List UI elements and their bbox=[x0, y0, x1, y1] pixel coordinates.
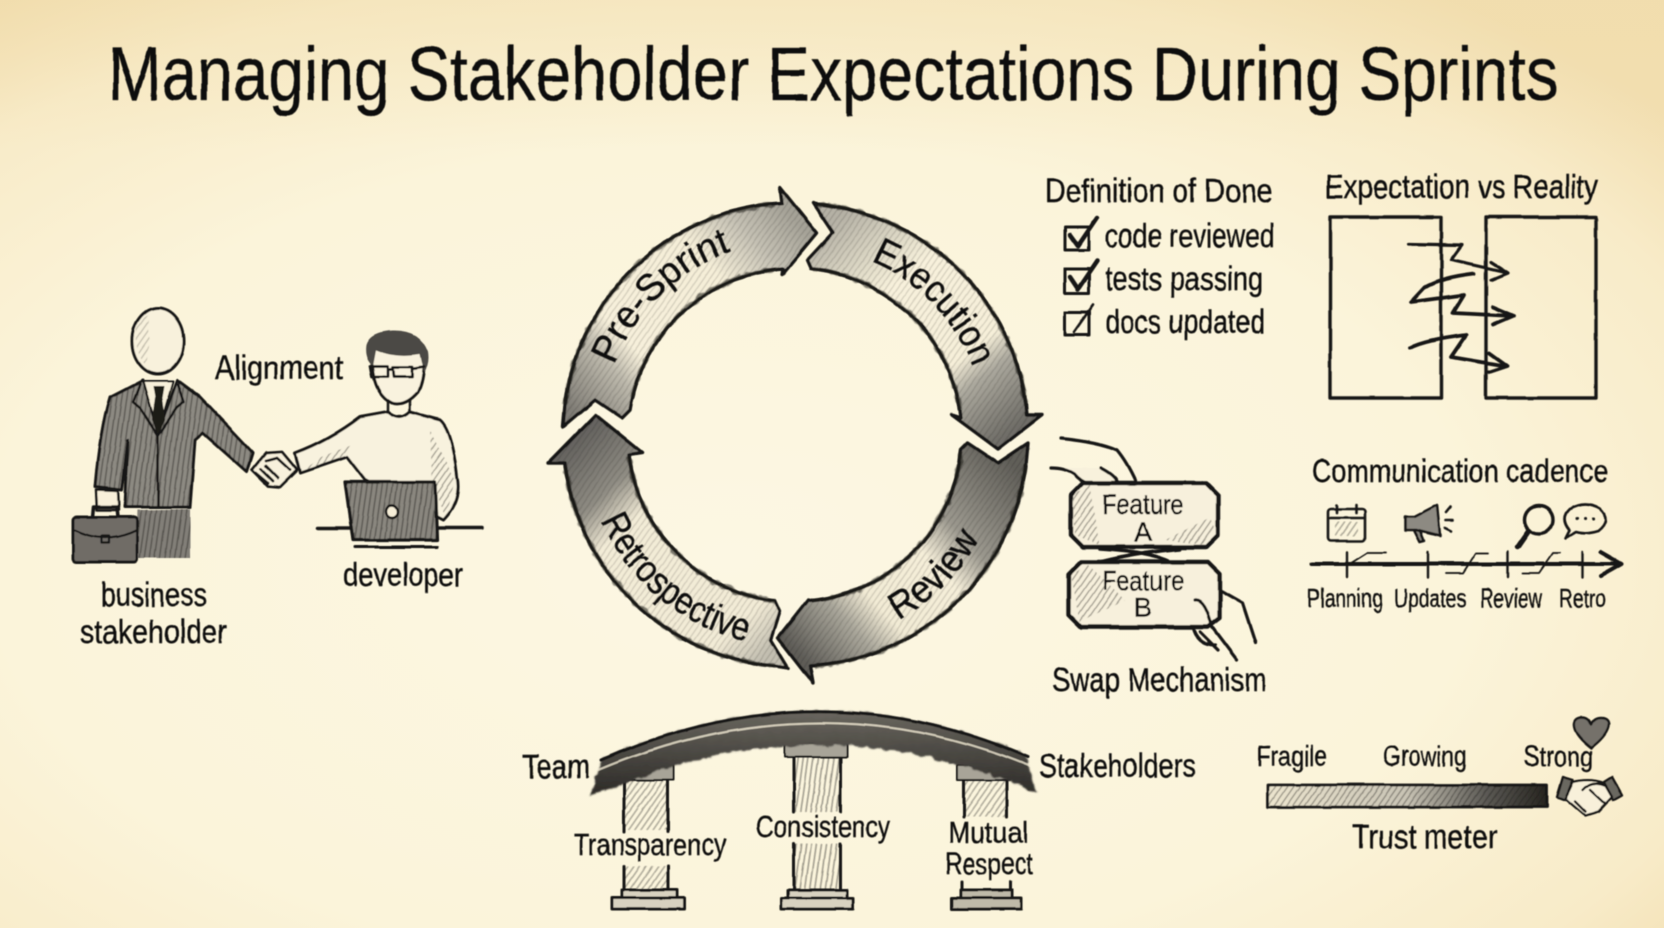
glasses bbox=[370, 366, 424, 377]
expectation box bbox=[1330, 217, 1441, 398]
heading: Swap Mechanism bbox=[1052, 661, 1267, 698]
trouser hatching bbox=[135, 509, 190, 558]
timeline labels: Review bbox=[1480, 583, 1542, 613]
bridge labels: Respect bbox=[945, 846, 1033, 881]
bridge labels bbox=[523, 747, 1196, 881]
pillar: right bbox=[952, 765, 1021, 909]
bridge labels: Mutual bbox=[948, 815, 1028, 850]
item: code reviewed bbox=[1065, 217, 1275, 254]
card hatching B bbox=[1071, 565, 1125, 622]
label: business stakeholder: business bbox=[101, 576, 207, 613]
hands bbox=[1565, 780, 1612, 816]
arrow: Retrospective bbox=[548, 415, 788, 668]
text Pre-Sprint: Pre-Sprint bbox=[590, 229, 732, 363]
card: Feature B bbox=[1069, 562, 1220, 627]
base bbox=[952, 890, 1021, 909]
card text: B bbox=[1134, 592, 1152, 623]
reality box bbox=[1486, 217, 1596, 398]
chart: sprint cycle ring bbox=[546, 185, 1044, 686]
panel: Definition of Done checklist bbox=[1045, 172, 1275, 340]
hatching bbox=[548, 415, 788, 668]
pillar: left bbox=[612, 765, 684, 909]
top hand fingers bbox=[1051, 468, 1118, 489]
icon: megaphone bbox=[1405, 505, 1453, 542]
heading: Expectation vs Reality bbox=[1325, 168, 1598, 205]
bridge labels: Consistency bbox=[756, 809, 890, 844]
shaft shading bbox=[625, 780, 667, 890]
briefcase handle bbox=[93, 507, 118, 517]
item: docs updated: docs updated bbox=[1105, 303, 1265, 340]
capital bbox=[957, 765, 1010, 780]
shirt bbox=[143, 381, 173, 433]
capital bbox=[619, 765, 674, 780]
label: business stakeholder: stakeholder bbox=[80, 613, 227, 650]
arch highlight lines bbox=[598, 723, 1030, 770]
hand holding case bbox=[96, 490, 119, 510]
twist between cards bbox=[1100, 549, 1180, 562]
text Retrospective: Retrospective bbox=[600, 510, 750, 642]
handshake hands bbox=[252, 452, 297, 487]
icon: magnifier bbox=[1518, 506, 1553, 547]
panel: Swap Mechanism bbox=[1051, 438, 1267, 698]
face bbox=[372, 350, 424, 404]
sweater bbox=[295, 412, 458, 520]
meter hatching bbox=[1268, 785, 1547, 807]
suit hatching bbox=[95, 380, 253, 507]
developer figure bbox=[295, 331, 482, 547]
card text: Feature bbox=[1102, 565, 1184, 596]
card text: Feature bbox=[1102, 489, 1184, 520]
label: developer: developer bbox=[343, 556, 463, 593]
item: tests passing: tests passing bbox=[1105, 260, 1263, 297]
shaft shading bbox=[965, 780, 1006, 817]
arrow: Review bbox=[778, 443, 1028, 683]
meter bar bbox=[1268, 785, 1547, 807]
hair bbox=[366, 331, 428, 372]
text Execution: Execution bbox=[872, 237, 990, 366]
timeline labels: Retro bbox=[1559, 583, 1606, 613]
scale labels: Strong bbox=[1524, 741, 1593, 773]
text Review: Review bbox=[886, 527, 978, 620]
ring label path: Pre-Sprint bbox=[614, 241, 830, 365]
trousers bbox=[135, 509, 190, 558]
panel: bridge of trust bbox=[523, 711, 1196, 909]
bottom hand bbox=[1193, 590, 1256, 660]
laptop bbox=[345, 482, 437, 540]
shaft shading bbox=[795, 757, 839, 890]
timeline ticks bbox=[1347, 552, 1582, 577]
icon: speech bubble bbox=[1565, 504, 1606, 538]
paper top shading bbox=[0, 0, 1664, 150]
hatching bbox=[808, 203, 1042, 449]
label: Alignment: Alignment bbox=[215, 349, 343, 386]
panel: Expectation vs Reality bbox=[1325, 168, 1598, 398]
briefcase flap bbox=[74, 530, 136, 543]
desk line bbox=[318, 526, 482, 530]
timeline arrow bbox=[1312, 552, 1622, 576]
top hand bbox=[1061, 438, 1136, 482]
card: Feature A bbox=[1071, 483, 1218, 547]
laptop base bbox=[355, 546, 437, 548]
business stakeholder figure bbox=[73, 308, 253, 562]
arch bbox=[590, 711, 1036, 797]
arrow: Execution bbox=[808, 203, 1042, 449]
ring label path: Retrospective bbox=[601, 521, 790, 647]
bridge labels: Stakeholders bbox=[1039, 747, 1196, 784]
base bbox=[612, 890, 684, 909]
suit jacket bbox=[95, 380, 253, 507]
arrow 3 bbox=[1410, 335, 1507, 372]
timeline labels: Updates bbox=[1394, 583, 1466, 613]
scale labels bbox=[1257, 741, 1593, 773]
sweater shading bbox=[300, 430, 455, 518]
icon: handshake bbox=[1557, 777, 1622, 816]
item: tests passing bbox=[1065, 260, 1263, 297]
panel: handshake between stakeholder and developer bbox=[73, 308, 482, 562]
icon: calendar bbox=[1328, 505, 1365, 541]
hatching bbox=[778, 443, 1028, 683]
capital bbox=[785, 743, 847, 757]
scale labels: Fragile bbox=[1257, 741, 1327, 773]
charcoal fuzz on ring edges bbox=[565, 204, 1026, 666]
hatching bbox=[563, 187, 817, 427]
item: code reviewed: code reviewed bbox=[1105, 217, 1275, 254]
base bbox=[781, 890, 853, 909]
card hatching A bbox=[1073, 485, 1215, 545]
card text bbox=[1102, 489, 1184, 623]
panel: Trust meter bbox=[1257, 718, 1622, 855]
arrow 2 bbox=[1411, 274, 1514, 325]
arrow: Pre-Sprint bbox=[563, 187, 817, 427]
item: docs updated bbox=[1065, 303, 1265, 340]
pillar: center bbox=[781, 743, 853, 909]
icon: heart bbox=[1574, 718, 1609, 748]
panel: Communication cadence bbox=[1307, 453, 1622, 613]
ring label path: Review bbox=[899, 460, 1005, 620]
arch outlines bbox=[601, 712, 1028, 760]
briefcase bbox=[73, 517, 137, 562]
caption: Trust meter bbox=[1352, 818, 1497, 855]
card text: A bbox=[1134, 516, 1153, 547]
laptop hatching bbox=[345, 482, 437, 540]
arrow 1 bbox=[1409, 244, 1508, 280]
ring label path: Execution bbox=[871, 261, 985, 420]
heading: Communication cadence bbox=[1312, 453, 1608, 489]
label: business stakeholder bbox=[80, 576, 227, 650]
timeline squiggles bbox=[1348, 553, 1560, 573]
head bbox=[132, 308, 184, 374]
neck bbox=[388, 398, 410, 417]
scale labels: Growing bbox=[1383, 741, 1467, 773]
bridge labels: Team bbox=[523, 748, 590, 785]
laptop logo bbox=[386, 506, 398, 518]
timeline labels bbox=[1307, 583, 1606, 613]
bridge labels: Transparency bbox=[574, 827, 726, 862]
lapels bbox=[133, 384, 184, 505]
heading: Definition of Done bbox=[1045, 172, 1273, 209]
head shading bbox=[136, 314, 150, 366]
tie bbox=[152, 386, 165, 434]
timeline labels: Planning bbox=[1307, 583, 1383, 613]
